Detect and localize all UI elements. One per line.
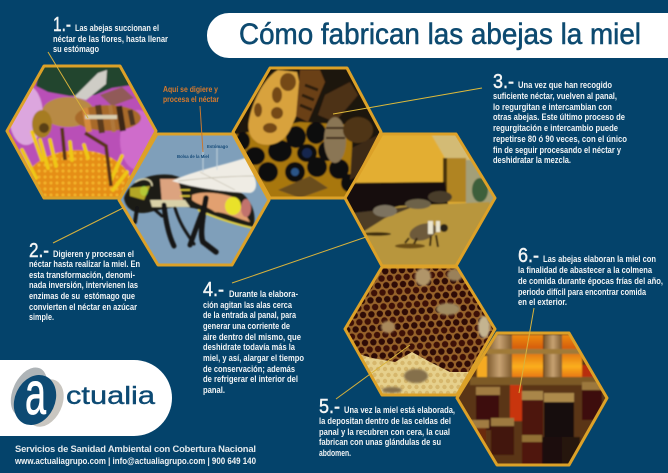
step 4 text: panal. — [203, 385, 225, 395]
leader line 5 — [336, 345, 410, 399]
step 4 text: de conservación; además — [203, 364, 295, 374]
step 4 text: Durante la elabora- — [229, 289, 298, 299]
step 4 text: 4.- — [203, 279, 224, 301]
logo wordmark: ctualia — [66, 382, 155, 410]
footer contact — [14, 443, 256, 466]
step 3 text: otras abejas. Este último proceso de — [493, 112, 625, 122]
step 2 text: simple. — [29, 312, 54, 322]
step 1 text: 1.- — [53, 14, 71, 36]
step 3 text: repetirse 80 ó 90 veces, con el único — [493, 134, 627, 144]
leader line 4 — [232, 237, 366, 283]
footer contact: www.actualiagrupo.com | info@actualiagrupo.com | 900 649 140 — [14, 455, 256, 466]
step 5 text: 5.- — [319, 396, 340, 418]
step 4 text: deshidrate todavía más la — [203, 342, 296, 352]
step 1 text: su estómago — [53, 44, 99, 54]
step 6 text: 6.- — [518, 245, 539, 267]
photo hexagon 1: bee on flower — [6, 64, 158, 200]
step 1 text: Las abejas succionan el — [75, 23, 159, 33]
step 2 text: 2.- — [29, 240, 49, 262]
orange callout: Aquí se digiere y — [163, 84, 218, 94]
step 5 text: la depositan dentro de las celdas del — [319, 416, 451, 426]
title banner — [207, 13, 668, 58]
step 3 text: deshidratar la mezcla. — [493, 155, 571, 165]
step 2 text: esta transformación, denomi- — [29, 270, 135, 280]
step 3 text: Una vez que han recogido — [518, 80, 612, 90]
step 4 text: ción agitan las alas cerca — [203, 300, 293, 310]
title banner: Cómo fabrican las abejas la miel — [239, 18, 641, 51]
step 2 text: Digieren y procesan el — [53, 249, 134, 259]
photo hexagon 6: honey jars — [455, 330, 610, 468]
step 5 text: fabrican con unas glándulas de su — [319, 437, 441, 447]
step 5 text: Una vez la miel está elaborada, — [344, 405, 455, 415]
diagram label: honey sac: Bolsa de la Miel — [177, 154, 209, 159]
step 3 text: 3.- — [493, 71, 514, 93]
step 3 text: lo regurgitan e intercambian con — [493, 102, 612, 112]
step 4 text: generar una corriente de — [203, 321, 290, 331]
step 4 text — [203, 279, 304, 395]
step 5 text: panal y la recubren con cera, la cual — [319, 427, 450, 437]
step 4 text: de la entrada al panal, para — [203, 310, 297, 320]
step 4 text: de refrigerar el interior del — [203, 374, 298, 384]
step 1 text — [53, 14, 168, 54]
step 4 text: miel, y así, alargar el tiempo — [203, 353, 304, 363]
leader line 6 — [519, 308, 534, 393]
step 2 text: enzimas de su estómago que — [29, 291, 135, 301]
logo mark: a — [25, 360, 46, 427]
leader line 2 — [53, 208, 123, 243]
step 2 text: convierten el néctar en azúcar — [29, 302, 137, 312]
leader line 1 — [48, 52, 88, 118]
photo hexagon 2: bee anatomy diagram — [115, 130, 275, 270]
step 6 text — [518, 245, 663, 307]
leader line 3 — [333, 88, 482, 114]
step 3 text: fin de seguir procesando el néctar y — [493, 145, 622, 155]
orange callout — [163, 84, 220, 104]
photo hexagon 3: bees on honeycomb — [230, 64, 385, 202]
step 2 text: nada inversión, intervienen las — [29, 280, 138, 290]
orange callout: procesa el néctar — [163, 94, 220, 104]
step 2 text: néctar hasta realizar la miel. En — [29, 259, 140, 269]
step 6 text: en el exterior. — [518, 297, 567, 307]
footer contact: Servicios de Sanidad Ambiental con Cobertura Nacional — [15, 443, 256, 454]
logo mark — [4, 360, 71, 433]
photo hexagon 4: bee at hive entrance — [340, 130, 500, 270]
step 2 text — [29, 240, 140, 322]
logo panel — [0, 360, 172, 436]
step 1 text: néctar de las flores, hasta llenar — [53, 34, 168, 44]
step 3 text — [493, 71, 627, 165]
step 5 text: abdomen. — [319, 448, 351, 458]
step 3 text: suficiente néctar, vuelven al panal, — [493, 91, 617, 101]
orange leader to digestive organ — [200, 106, 203, 152]
step 3 text: regurgitación e intercambio puede — [493, 123, 618, 133]
step 5 text — [319, 396, 455, 458]
step 4 text: aire dentro del mismo, que — [203, 332, 301, 342]
photo hexagon 5: honey cells — [340, 262, 500, 400]
diagram label: stomach: Estómago — [207, 144, 228, 149]
